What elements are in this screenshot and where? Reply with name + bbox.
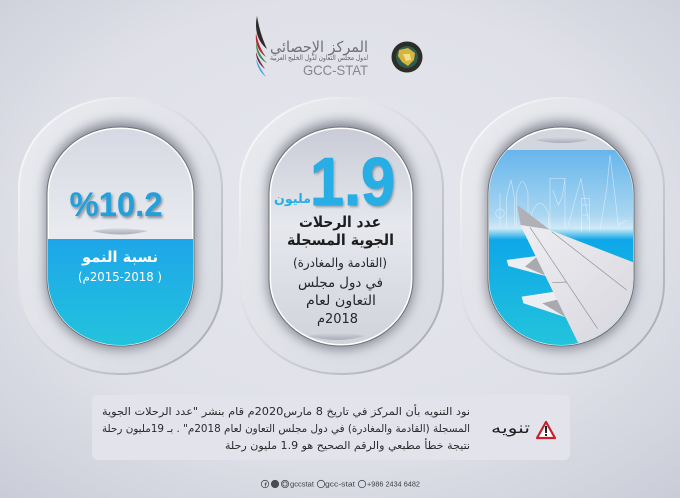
icon: GCC emblem [392, 42, 422, 72]
notice text: نتيجة خطأ مطبعي والرقم الصحيح هو 1.9 مليون رحلة [225, 438, 470, 452]
stat: 1.9: 1.9 [312, 146, 396, 222]
social handles: gccstat [290, 482, 314, 488]
notice background [92, 395, 570, 460]
panel: airplane window view [461, 98, 664, 374]
lower flap [522, 292, 566, 317]
stat: 1.9: 1.9 [310, 144, 395, 220]
window shade handle [92, 228, 148, 234]
wing [506, 205, 633, 343]
sky [489, 150, 633, 228]
window pane [490, 129, 632, 344]
heading: registered flights: عدد الرحلات [299, 213, 381, 231]
notice heading: تنويه [491, 419, 530, 437]
view: sky, sea and wing [489, 150, 633, 345]
window pane [49, 129, 192, 344]
social icons [261, 480, 366, 488]
notice text: نود التنويه بأن المركز في تاريخ 8 مارس2020م قام بنشر "عدد الرحلات الجوية [102, 404, 470, 418]
panel: growth rate window [19, 98, 222, 374]
window frame [461, 98, 664, 374]
heading: registered flights [287, 213, 394, 249]
heading: registered flights: الجوية المسجلة [287, 231, 394, 249]
window frame [240, 98, 443, 374]
logo Arabic subtitle: لدول مجلس التعاون لدول الخليج العربية [270, 54, 368, 62]
stat unit: million: مليون [274, 192, 311, 207]
label: growth rate: نسبة النمو [81, 248, 158, 266]
panel: flights number window [240, 98, 443, 374]
blue fill [48, 239, 193, 345]
main wing [520, 225, 633, 343]
footer: social media contacts [261, 480, 420, 488]
social handles [290, 482, 420, 488]
window shade handle [535, 137, 589, 143]
social handles: gcc-stat [325, 482, 355, 488]
text: flights description: (القادمة والمغادرة) [293, 255, 387, 271]
text: flights description: 2018م [317, 311, 358, 327]
window pane [271, 129, 411, 344]
sea [489, 228, 633, 346]
text: flights description: في دول مجلس [298, 275, 383, 291]
upper flap [507, 256, 548, 277]
window frame [19, 98, 222, 374]
logo: GCC-STAT header [256, 16, 422, 78]
notice text [102, 404, 470, 452]
icon: warning triangle [537, 422, 555, 438]
skyline [496, 155, 627, 232]
wing tip [517, 205, 549, 229]
window shade handle [308, 332, 365, 340]
logo GCC-STAT wordmark: GCC-STAT [303, 62, 368, 78]
logo stripes [256, 16, 267, 77]
notice text: المسجلة (القادمة والمغادرة) في دول مجلس التعاون لعام 2018م" . بـ 19مليون رحلة [102, 423, 470, 435]
text: flights description [293, 255, 387, 327]
stat: 10.2 percent: %10.2 [70, 186, 162, 224]
social handles: +986 2434 6482 [367, 482, 420, 488]
callout: correction notice [92, 395, 570, 460]
label: period: ( 2015-2018م) [78, 270, 162, 284]
text: flights description: التعاون لعام [306, 293, 376, 309]
logo Arabic name: المركز الإحصائي [270, 38, 368, 57]
stat: 10.2 percent: %10.2 [71, 188, 164, 226]
